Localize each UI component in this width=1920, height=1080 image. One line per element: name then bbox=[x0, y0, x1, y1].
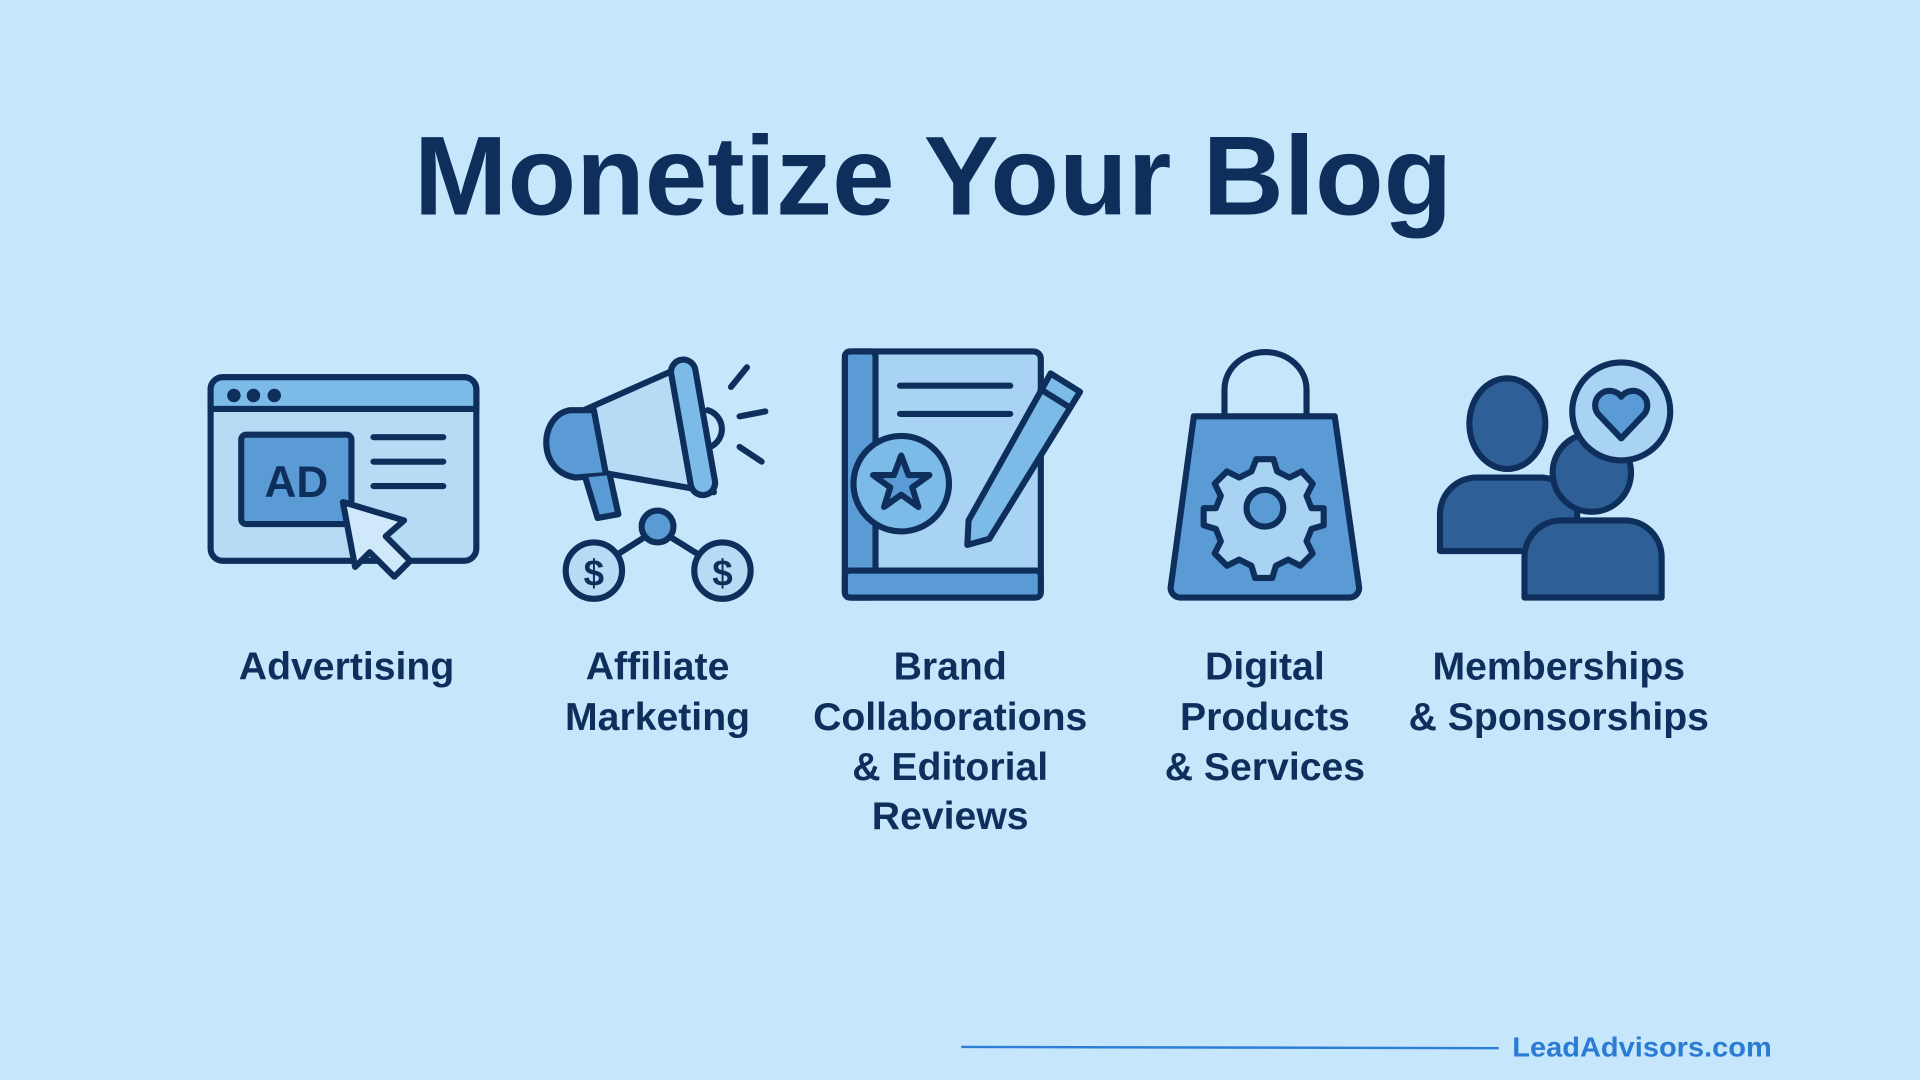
icon: megaphone affiliate bbox=[546, 358, 765, 599]
labels bbox=[239, 646, 1709, 838]
icon: members people heart bbox=[1440, 362, 1670, 598]
labels: & Editorial bbox=[852, 746, 1048, 789]
labels: & Sponsorships bbox=[1409, 696, 1709, 739]
labels: Reviews bbox=[872, 795, 1029, 838]
labels: Brand bbox=[894, 646, 1007, 689]
icon: shopping bag gear bbox=[1171, 352, 1359, 598]
labels: & Services bbox=[1165, 746, 1365, 789]
text: $ bbox=[584, 552, 604, 593]
labels: Marketing bbox=[565, 696, 750, 739]
footer brand: LeadAdvisors.com bbox=[1512, 1032, 1772, 1063]
icon: advertising browser bbox=[211, 377, 476, 577]
labels: Advertising bbox=[239, 646, 454, 689]
icon: book with pencil bbox=[845, 351, 1080, 598]
title: Monetize Your Blog bbox=[414, 112, 1452, 238]
labels: Products bbox=[1180, 696, 1350, 739]
labels: Memberships bbox=[1433, 646, 1685, 689]
labels: Collaborations bbox=[813, 696, 1087, 739]
text: AD bbox=[264, 458, 328, 507]
labels: Digital bbox=[1205, 646, 1325, 689]
labels: Affiliate bbox=[586, 646, 729, 689]
footer line bbox=[961, 1047, 1499, 1048]
text: $ bbox=[712, 552, 733, 593]
